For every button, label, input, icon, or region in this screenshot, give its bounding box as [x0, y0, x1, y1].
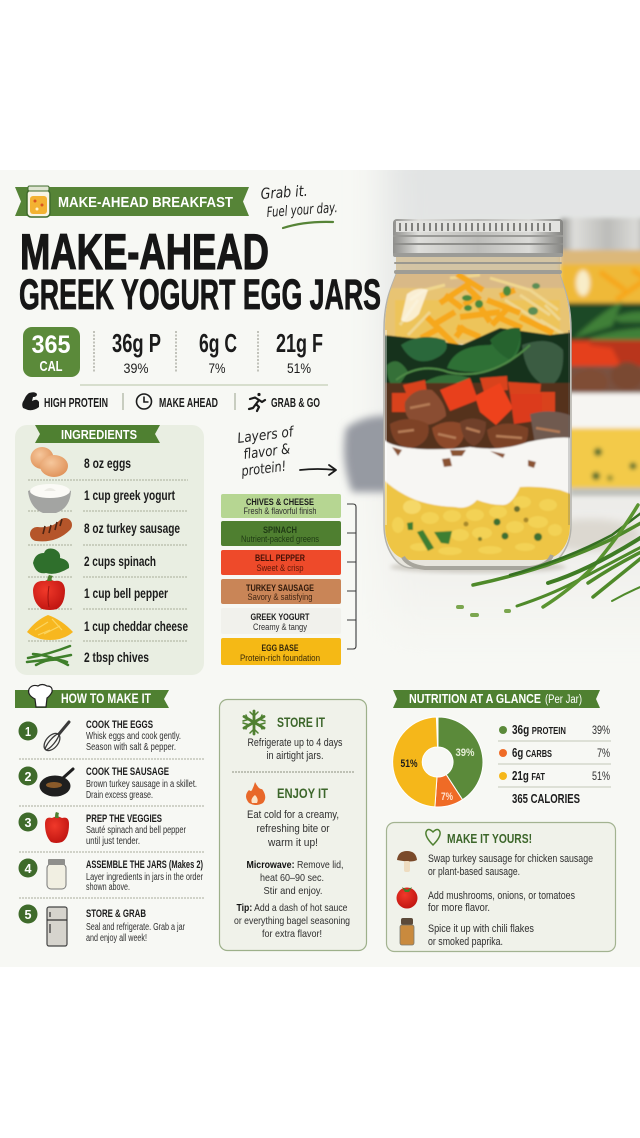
- ribbon: how to make it: HOW TO MAKE IT: [61, 691, 152, 706]
- tagline handwriting: Grab it.: [260, 182, 308, 203]
- panel: make it yours: or plant-based sausage.: [428, 866, 520, 878]
- step 5: 5: [24, 907, 32, 922]
- panel: make it yours: [386, 822, 616, 952]
- panel: store and enjoy: [220, 700, 366, 950]
- ingredients ribbon: [35, 425, 160, 443]
- panel: ingredients: 1 cup bell pepper: [84, 585, 168, 601]
- icon: spice shaker: [400, 918, 414, 945]
- step 5: and enjoy all week!: [86, 933, 147, 944]
- step 4: shown above.: [86, 882, 130, 893]
- calorie badge: CAL: [40, 358, 62, 375]
- step 3: Sauté spinach and bell pepper: [86, 825, 186, 836]
- jar shadow on table: [566, 518, 640, 553]
- panel: make it yours: MAKE IT YOURS!: [447, 831, 532, 846]
- step 3: 3: [24, 815, 32, 830]
- macro stats row: 39%: [124, 360, 148, 376]
- nutrition legend: 7%: [597, 746, 610, 760]
- layer: chives and cheese: CHIVES & CHEESE: [246, 497, 314, 507]
- tagline handwriting: [260, 182, 338, 228]
- icon: empty jar: [47, 859, 66, 889]
- panel: store and enjoy: ENJOY IT: [277, 785, 328, 801]
- calorie badge: [23, 327, 80, 377]
- metal lid: [393, 219, 563, 257]
- nutrition legend: 39%: [592, 723, 610, 737]
- icon: whisk: [41, 722, 69, 754]
- benefits row: HIGH PROTEIN: [44, 396, 108, 410]
- egg base layer: [384, 480, 574, 562]
- icon: yogurt bowl: [28, 484, 71, 513]
- benefits row: GRAB & GO: [271, 396, 320, 410]
- callout: layers of flavor: Layers of: [237, 424, 296, 447]
- nutrition legend: 6g CARBS: [512, 745, 552, 760]
- callout: layers of flavor: protein!: [240, 459, 287, 480]
- spinach layer: [385, 327, 570, 384]
- tagline handwriting: Fuel your day.: [266, 200, 338, 221]
- panel: store and enjoy: heat 60–90 sec.: [260, 872, 324, 884]
- step 5: STORE & GRAB: [86, 908, 146, 920]
- benefits row: MAKE AHEAD: [159, 396, 218, 410]
- icon: breakfast jar: [27, 186, 50, 217]
- calorie badge: 365: [32, 331, 71, 359]
- icon: shredded cheddar: [27, 615, 73, 640]
- layer legend: [221, 494, 356, 665]
- cheese layer: [385, 287, 570, 346]
- icon: chives: [27, 646, 71, 665]
- panel: ingredients: 8 oz eggs: [84, 455, 131, 471]
- bell pepper and turkey sausage layer: [384, 383, 574, 453]
- panel: ingredients: 1 cup cheddar cheese: [84, 618, 188, 634]
- panel: store and enjoy: warm it up!: [267, 837, 318, 849]
- callout: layers of flavor: [237, 424, 336, 480]
- page background: [0, 170, 640, 967]
- bracket: [347, 504, 356, 649]
- title: GREEK YOGURT EGG JARS: [19, 271, 381, 319]
- title: [19, 224, 381, 319]
- panel: store and enjoy: STORE IT: [277, 714, 325, 730]
- panel: ingredients: [15, 425, 204, 675]
- step 1: [18, 719, 181, 754]
- icon: clock: [136, 394, 152, 409]
- step 3: PREP THE VEGGIES: [86, 813, 162, 825]
- macro stats row: 51%: [287, 360, 311, 376]
- layer: bell pepper: [221, 550, 341, 575]
- ribbon: nutrition: [393, 690, 600, 708]
- step 1: Whisk eggs and cook gently.: [86, 731, 181, 742]
- panel: store and enjoy: Stir and enjoy.: [264, 885, 322, 897]
- icon: turkey sausage: [37, 519, 65, 534]
- layer: egg base: EGG BASE: [262, 643, 298, 653]
- panel: store and enjoy: in airtight jars.: [266, 750, 324, 762]
- jar neck threads: [396, 257, 560, 270]
- panel: make it yours: for more flavor.: [428, 902, 490, 914]
- icon: flame: [246, 782, 265, 805]
- layer: spinach: [221, 521, 341, 546]
- panel: make it yours: or smoked paprika.: [428, 936, 503, 948]
- panel: make it yours: Add mushrooms, onions, or tomatoes: [428, 890, 575, 902]
- layer: turkey sausage: [221, 579, 341, 604]
- panel: store and enjoy: or everything bagel seasoning: [234, 915, 350, 927]
- step 3: until just tender.: [86, 836, 140, 847]
- header ribbon: make-ahead breakfast: [15, 186, 249, 217]
- step 3: [18, 812, 186, 847]
- step 4: ASSEMBLE THE JARS (Makes 2): [86, 859, 203, 871]
- panel: store and enjoy: Refrigerate up to 4 days: [248, 737, 343, 749]
- panel: ingredients: 2 cups spinach: [84, 553, 156, 569]
- icon: mushroom: [397, 851, 417, 872]
- panel: ingredients: 1 cup greek yogurt: [84, 487, 175, 503]
- donut chart: [393, 717, 483, 807]
- macro stats row: 36g P: [112, 328, 161, 358]
- callout: layers of flavor: flavor &: [243, 441, 291, 463]
- icon: spinach: [33, 548, 69, 574]
- layer: turkey sausage: Savory & satisfying: [248, 592, 312, 602]
- step 4: 4: [24, 861, 32, 876]
- ribbon: nutrition: (Per Jar): [545, 694, 582, 706]
- nutrition legend: 51%: [592, 769, 610, 783]
- blurred grey towel: [344, 416, 392, 492]
- icon: bell pepper: [45, 812, 69, 843]
- greek yogurt layer: [384, 438, 574, 508]
- panel: ingredients: 8 oz turkey sausage: [84, 520, 180, 536]
- panel: make it yours: Swap turkey sausage for chicken sausage: [428, 853, 593, 865]
- second jar, blurred: [560, 218, 640, 496]
- step 1: Season with salt & pepper.: [86, 742, 176, 753]
- layer: greek yogurt: GREEK YOGURT: [250, 612, 310, 622]
- nutrition legend: 21g FAT: [512, 768, 545, 783]
- icon: refrigerator: [47, 907, 67, 946]
- icon: chef hat: [29, 684, 52, 707]
- benefits row: [22, 392, 320, 411]
- icon: heart: [426, 830, 440, 845]
- layer: turkey sausage: TURKEY SAUSAGE: [246, 583, 314, 593]
- hero photo: mason jars with layered breakfast: [339, 170, 640, 617]
- layer: spinach: Nutrient-packed greens: [241, 534, 319, 544]
- icon: eggs: [30, 447, 68, 477]
- macro stats row: 6g C: [199, 328, 237, 358]
- panel: store and enjoy: Microwave: Remove lid,: [246, 859, 344, 871]
- icon: bell pepper: [33, 575, 65, 610]
- ingredients ribbon: INGREDIENTS: [61, 427, 137, 442]
- step 5: Seal and refrigerate. Grab a jar: [86, 922, 185, 933]
- macro stats row: 7%: [208, 360, 226, 376]
- step 1: 1: [25, 724, 31, 739]
- panel: store and enjoy: Eat cold for a creamy,: [247, 809, 339, 821]
- step 5: [18, 904, 185, 946]
- photo backdrop: [380, 170, 640, 552]
- icon: runner: [249, 393, 265, 411]
- layer: bell pepper: BELL PEPPER: [255, 553, 305, 563]
- layer: bell pepper: Sweet & crisp: [256, 563, 304, 573]
- step 2: Drain excess grease.: [86, 790, 153, 801]
- panel: store and enjoy: for extra flavor!: [262, 928, 322, 940]
- step 4: [18, 858, 203, 893]
- donut chart: 7%: [441, 791, 453, 803]
- layer: greek yogurt: [221, 608, 341, 634]
- step 1: COOK THE EGGS: [86, 719, 153, 731]
- glass base: [403, 555, 552, 568]
- section: how to make it: [15, 684, 205, 946]
- step 2: Brown turkey sausage in a skillet.: [86, 779, 197, 790]
- layer: chives and cheese: Fresh & flavorful finish: [244, 506, 316, 516]
- panel: store and enjoy: refreshing bite or: [256, 823, 330, 835]
- layer: egg base: [221, 638, 341, 665]
- icon: tomato: [396, 887, 418, 908]
- panel: ingredients: 2 tbsp chives: [84, 649, 149, 665]
- icon: skillet: [40, 769, 73, 796]
- title: MAKE-AHEAD: [20, 224, 269, 280]
- layer: chives and cheese: [221, 494, 341, 518]
- header ribbon: make-ahead breakfast: MAKE-AHEAD BREAKFAST: [58, 194, 233, 211]
- ribbon: nutrition: NUTRITION AT A GLANCE: [409, 691, 541, 706]
- layer: spinach: SPINACH: [263, 525, 297, 535]
- nutrition legend: 365 CALORIES: [512, 792, 580, 806]
- layer: egg base: Protein-rich foundation: [240, 653, 320, 663]
- fresh chives: [458, 505, 640, 615]
- step 4: Layer ingredients in jars in the order: [86, 872, 203, 883]
- panel: store and enjoy: Tip: Add a dash of hot sauce: [236, 902, 348, 914]
- icon: flexed arm: [22, 392, 39, 410]
- step 2: COOK THE SAUSAGE: [86, 766, 169, 778]
- arrow to jar: [300, 465, 336, 475]
- main jar: [384, 219, 574, 573]
- nutrition legend: 36g PROTEIN: [512, 722, 566, 737]
- icon: snowflake: [243, 711, 265, 734]
- donut chart: 51%: [400, 758, 418, 770]
- panel: make it yours: Spice it up with chili flakes: [428, 923, 534, 935]
- step 2: 2: [24, 769, 32, 784]
- section: nutrition at a glance: [393, 690, 611, 807]
- layer: greek yogurt: Creamy & tangy: [253, 622, 307, 632]
- step 2: [18, 766, 197, 801]
- macro stats row: 21g F: [276, 328, 323, 358]
- donut chart: 39%: [456, 747, 475, 759]
- macro stats row: [94, 328, 323, 376]
- ribbon: how to make it: [15, 690, 169, 708]
- nutrition legend: [498, 722, 611, 806]
